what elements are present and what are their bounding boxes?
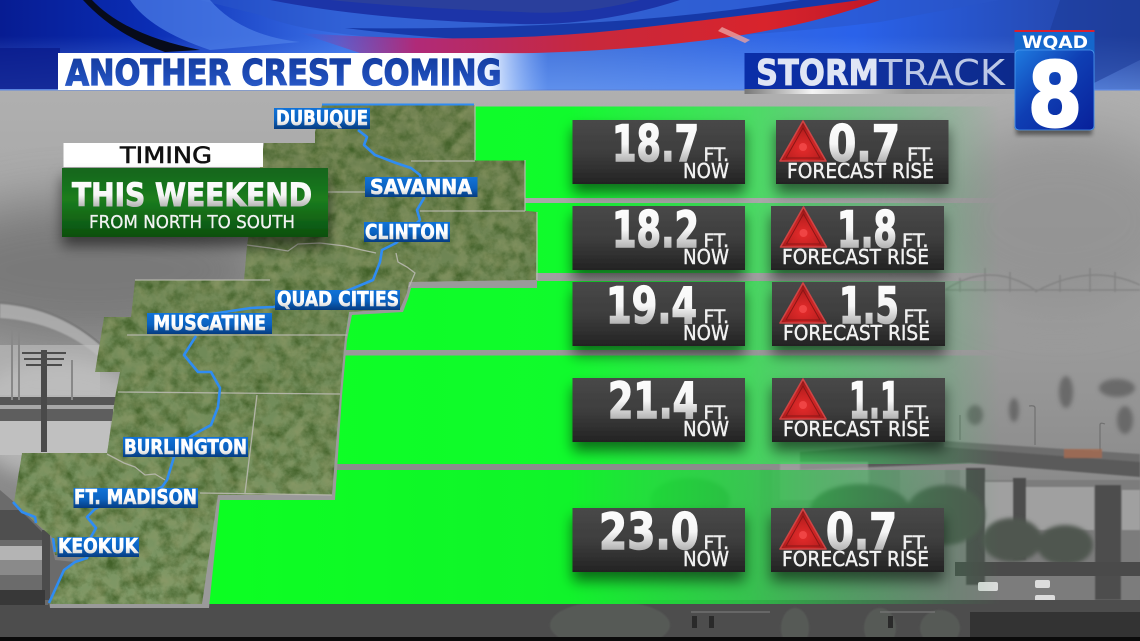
forecast rise card: FORECAST RISE [783, 321, 930, 345]
mississippi river [13, 104, 474, 603]
current level card: NOW [683, 321, 729, 345]
current level card: NOW [683, 417, 729, 441]
this weekend box: FROM NORTH TO SOUTH [89, 212, 295, 233]
current level card: NOW [683, 159, 729, 183]
forecast rise card: FORECAST RISE [782, 547, 929, 571]
forecast rise card: 1.1 [849, 372, 900, 430]
green screen bands [207, 106, 1000, 604]
stormtrack branding bar: TRACK [878, 53, 1006, 94]
city label: burlington: BURLINGTON [124, 435, 247, 459]
satellite map shape [14, 105, 537, 604]
stormtrack branding bar [744, 53, 1014, 94]
forecast rise card: 1.5 [839, 277, 899, 335]
forecast rise card: FT. [904, 306, 930, 328]
city label: dubuque: DUBUQUE [276, 106, 368, 130]
forecast rise card: FT. [902, 230, 928, 252]
forecast rise card: FORECAST RISE [787, 159, 934, 183]
header band with swooshes [0, 0, 1140, 90]
row 3: clinton stage [572, 277, 945, 346]
row 1: dubuque stage [572, 115, 948, 184]
this weekend box: THIS WEEKEND [72, 176, 312, 214]
forecast rise card: FORECAST RISE [783, 417, 930, 441]
city label: savanna: SAVANNA [370, 175, 472, 199]
map of river counties [13, 104, 537, 608]
forecast rise card [771, 201, 944, 270]
current level card [572, 115, 745, 184]
current level card: FT. [704, 306, 729, 328]
forecast rise card: FT. [907, 144, 934, 166]
row 4: quad cities stage [572, 372, 945, 442]
forecast rise card: 1.8 [837, 201, 897, 259]
current level card: FT. [704, 230, 729, 252]
row 5: burlington stage [572, 503, 944, 572]
current level card [572, 372, 745, 442]
forecast rise card [776, 115, 948, 184]
city label: ft. madison: FT. MADISON [74, 485, 197, 509]
current level card: 18.2 [612, 201, 699, 259]
row 2: savanna stage [572, 201, 944, 270]
current level card [572, 201, 745, 270]
current level card: FT. [704, 532, 729, 554]
forecast rise card [772, 372, 945, 442]
logo: WQAD 8: WQAD [1022, 33, 1088, 53]
logo: WQAD 8: 8 [1028, 44, 1082, 147]
county border lines [107, 105, 537, 495]
current level card: FT. [704, 144, 729, 166]
logo: WQAD 8 [1014, 30, 1094, 147]
current level card: 18.7 [612, 115, 699, 173]
current level card: 19.4 [606, 277, 697, 335]
timing heading: TIMING [119, 144, 212, 169]
current level card: 21.4 [608, 372, 698, 430]
forecast rise card: 0.7 [828, 115, 900, 173]
forecast rise card: FT. [904, 402, 930, 424]
city label: keokuk: KEOKUK [58, 534, 139, 558]
map bevel edges [49, 280, 537, 608]
current level card: 23.0 [599, 503, 699, 561]
forecast rise card [772, 277, 945, 346]
forecast rise card [771, 503, 944, 572]
current level card [572, 503, 745, 572]
forecast rise card: FT. [902, 532, 928, 554]
current level card [572, 277, 745, 346]
forecast rise card: 0.7 [826, 503, 897, 561]
title: another crest coming: ANOTHER CREST COMING [66, 53, 502, 94]
timing panel [62, 143, 328, 237]
stormtrack branding bar: STORM [756, 53, 879, 94]
current level card: NOW [683, 245, 729, 269]
forecast rise card: FORECAST RISE [782, 245, 929, 269]
city label: quad cities: QUAD CITIES [277, 287, 399, 311]
current level card: NOW [683, 547, 729, 571]
this weekend box [62, 168, 328, 237]
current level card: FT. [704, 402, 729, 424]
timing heading [64, 143, 263, 169]
city label: muscatine: MUSCATINE [153, 311, 266, 335]
city label: clinton: CLINTON [365, 220, 449, 244]
